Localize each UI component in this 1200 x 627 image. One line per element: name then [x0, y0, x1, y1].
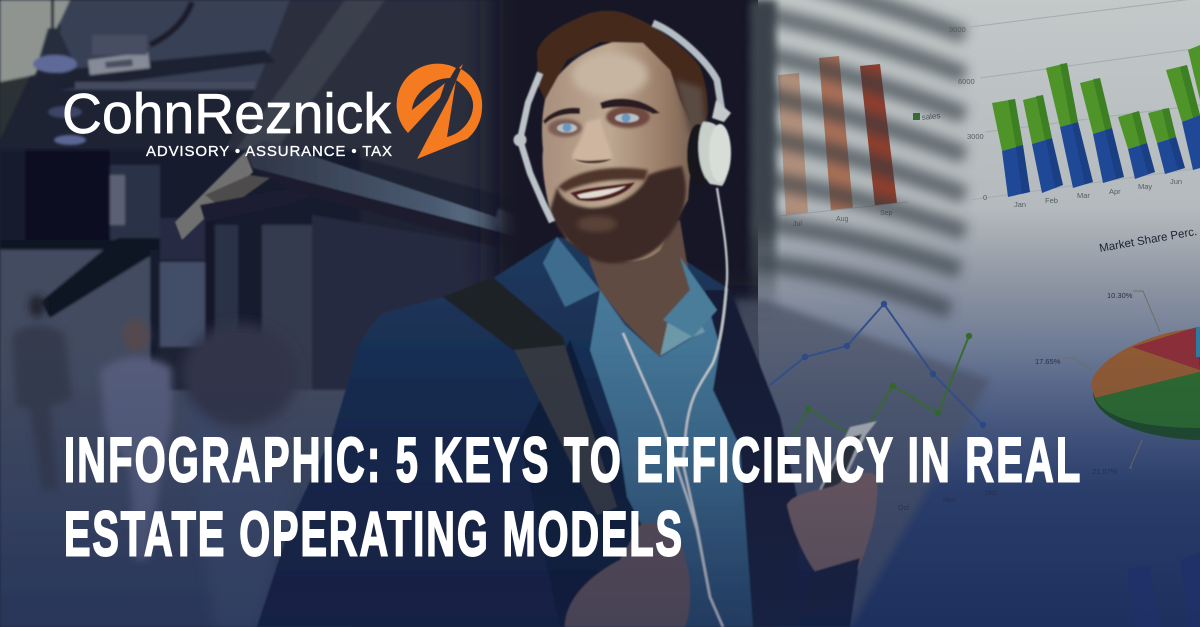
headphones: [514, 23, 731, 627]
title: INFOGRAPHIC: 5 KEYS TO EFFICIENCY IN REAL: [64, 425, 1080, 496]
stacked 3D bar chart: 6000: [958, 77, 975, 86]
window blind shadows: [755, 0, 965, 310]
hanging lamps: [51, 0, 54, 30]
neck: [585, 220, 693, 357]
chin soul patch fade: [577, 216, 617, 232]
hair: [537, 11, 708, 130]
canopy roof: [175, 140, 560, 250]
wordmark: CohnReznick: [62, 82, 391, 146]
tagline: ADVISORY • ASSURANCE • TAX: [146, 143, 392, 160]
strip of roof left of chin: [495, 208, 555, 250]
rust bar chart: Aug: [836, 216, 849, 223]
forehead highlight: [572, 53, 648, 97]
line chart: Oct: [898, 505, 909, 512]
stacked 3D bar chart: Jan: [1014, 200, 1026, 209]
faint bars at bottom right: [1127, 552, 1200, 627]
hand holding phone: [787, 421, 877, 612]
shirt inner V: [660, 318, 705, 356]
sales legend: sales: [921, 111, 941, 122]
title: [64, 425, 1080, 570]
line chart: Nov: [943, 497, 956, 504]
market share pie chart: 17.65%: [1035, 357, 1061, 366]
face: [542, 40, 692, 262]
upper ceiling area: [60, 0, 290, 90]
eye sockets: [548, 106, 650, 137]
stacked 3D bar chart: [949, 0, 1200, 209]
shirt: [590, 290, 753, 627]
stacked 3D bar chart: Feb: [1045, 196, 1058, 205]
man with headphones: [257, 11, 877, 627]
duct: [150, 2, 192, 45]
left building scene: [0, 0, 790, 627]
rust bar chart: Jul: [793, 221, 802, 228]
blurred pedestrians and shrubs: [12, 295, 298, 627]
horizontal beams: [60, 50, 275, 90]
nostril shadow: [574, 159, 612, 164]
bright window corner: [0, 0, 70, 82]
stacked 3D bar chart: Mar: [1077, 191, 1090, 200]
eyes and brows: [543, 99, 660, 132]
stacked 3D bar chart: Jun: [1170, 177, 1182, 186]
nose: [572, 118, 613, 164]
stacked 3D bar chart: May: [1138, 182, 1152, 191]
jacket: [257, 237, 860, 627]
air conditioning unit: [88, 52, 150, 75]
logo: [62, 64, 482, 160]
green series: [992, 45, 1200, 151]
beard: [550, 166, 686, 263]
shoulder bag strap: [443, 277, 617, 515]
collar: [543, 237, 717, 337]
stacked 3D bar chart: 0: [983, 193, 987, 202]
head: [537, 11, 708, 263]
market share pie chart: [1035, 224, 1200, 476]
lower ground and wall: [0, 150, 520, 627]
line chart: [770, 301, 998, 519]
market share pie chart: 21.07%: [1092, 467, 1118, 476]
dark centre behind head: [490, 0, 790, 295]
stacked 3D bar chart: Apr: [1109, 187, 1121, 196]
logo mark: [397, 64, 482, 159]
mouth: [570, 182, 635, 201]
blue series: [1002, 115, 1200, 197]
stacked 3D bar chart: 3000: [967, 132, 984, 141]
right wall with charts: [735, 0, 1200, 627]
rust bar chart: [778, 56, 941, 228]
rust bar chart: Sep: [880, 210, 893, 217]
temple fade: [676, 80, 705, 135]
moustache: [558, 168, 648, 192]
market share pie chart: 10.30%: [1107, 291, 1133, 300]
title: ESTATE OPERATING MODELS: [64, 499, 682, 570]
line chart: Dec: [985, 490, 998, 497]
hand on strap: [565, 523, 690, 627]
stacked 3D bar chart: 9000: [949, 25, 966, 34]
earphone wires: [683, 188, 727, 627]
line chart: Sep: [853, 512, 866, 519]
shaded bar sides: [1016, 122, 1185, 194]
